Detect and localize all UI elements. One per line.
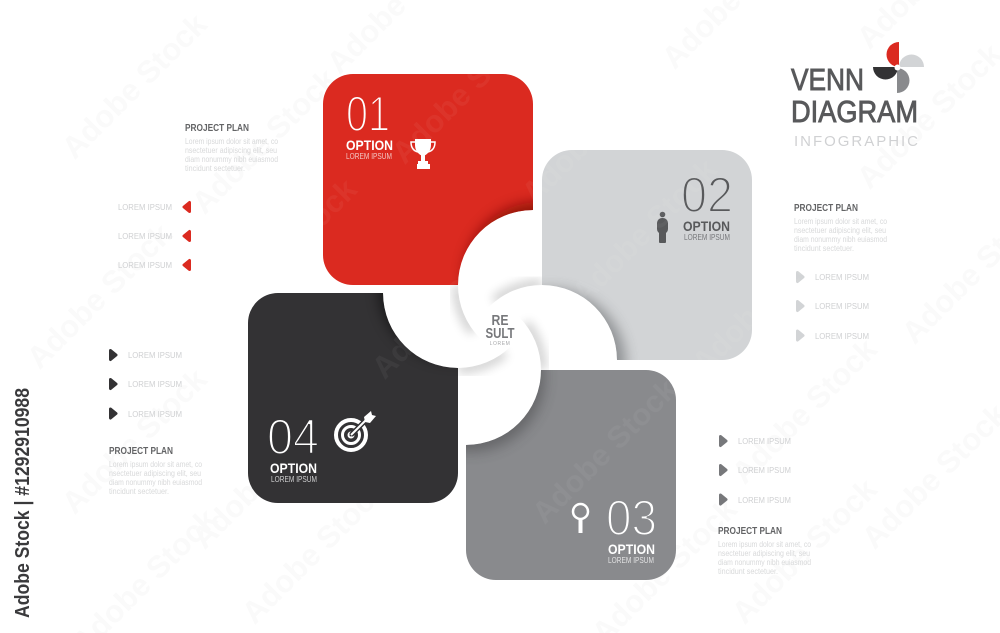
panel: 02 light grey [542,150,752,360]
number 03: 03 [606,490,657,546]
text block: bottom-left project plan: nsectetuer adipiscing elit, seu [109,469,201,478]
text block: bottom-left project plan: diam nonummy nibh euiasmod [109,478,202,487]
background watermark: Adobe Stock [185,396,344,555]
result label: SULT [486,326,515,342]
panel: 04 dark [248,293,458,503]
background watermark: Adobe Stock [185,61,344,220]
list: top-right light grey markers: LOREM IPSUM [815,302,869,311]
text block: top-right project plan: tincidunt sectetuer. [794,244,854,253]
title: INFOGRAPHIC [794,133,918,150]
option label 01: OPTION [346,137,393,153]
panel: 03 mid grey [466,370,676,580]
background watermark: Adobe Stock [55,361,214,520]
list: bottom-left dark markers: LOREM IPSUM [128,410,182,419]
sublabel 02: LOREM IPSUM [684,232,730,242]
text block: bottom-right project plan: PROJECT PLAN [718,526,782,537]
icon: pinwheel logo [873,42,924,93]
list: top-left red markers: LOREM IPSUM [118,232,172,241]
sublabel 04: LOREM IPSUM [271,474,317,484]
text block: bottom-right project plan: Lorem ipsum dolor sit amet, co [718,540,811,549]
title: DIAGRAM [791,94,918,129]
title: VENN [791,62,864,97]
text block: bottom-right project plan: tincidunt sectetuer. [718,567,778,576]
list: bottom-left dark markers: LOREM IPSUM [128,351,182,360]
result label: LOREM [490,341,510,347]
background watermark: Adobe Stock [725,471,884,630]
overlay watermark on panels: Adobe Stock [525,371,684,530]
panel: 01 red [323,74,533,285]
overlay watermark on panels: Adobe Stock [515,51,674,210]
text block: top-right project plan: Lorem ipsum dolor sit amet, co [794,217,887,226]
option label 04: OPTION [270,460,317,476]
sublabel 01: LOREM IPSUM [346,151,392,161]
icon: magnifier [573,504,588,533]
overlay watermark on panels: Adobe Stock [365,226,524,385]
overlay watermark on panels: Adobe Stock [385,11,544,170]
background watermark: Adobe Stock [55,6,214,165]
sublabel 03: LOREM IPSUM [608,555,654,565]
result label [486,313,515,347]
number 04: 04 [267,409,319,465]
text block: top-right project plan [794,203,887,253]
text block: top-right project plan: nsectetuer adipiscing elit, seu [794,226,886,235]
text block: bottom-right project plan: diam nonummy nibh euiasmod [718,558,811,567]
list: bottom-left dark markers: LOREM IPSUM [128,380,182,389]
option label 03: OPTION [608,541,655,557]
text block: top-left project plan: PROJECT PLAN [185,123,249,134]
background watermark: Adobe Stock [235,471,394,630]
text block: top-right project plan: PROJECT PLAN [794,203,858,214]
title [791,62,918,150]
list: top-left red markers: LOREM IPSUM [118,261,172,270]
list: top-left red markers: LOREM IPSUM [118,203,172,212]
text block: top-left project plan [185,123,278,173]
list: bottom-left dark markers [110,350,182,419]
side credit: Adobe Stock | #1292910988 [12,388,34,618]
list: bottom-right grey markers: LOREM IPSUM [738,466,791,475]
text block: bottom-left project plan: tincidunt sectetuer. [109,487,169,496]
number 01: 01 [346,86,390,142]
overlay watermark on panels: Adobe Stock [205,171,364,330]
list: top-left red markers [118,202,190,270]
text block: top-left project plan: nsectetuer adipiscing elit, seu [185,146,277,155]
icon: person [657,212,668,243]
centre swirl shadows [458,285,542,370]
text block: bottom-left project plan: Lorem ipsum dolor sit amet, co [109,460,202,469]
list: bottom-right grey markers: LOREM IPSUM [738,437,791,446]
list: bottom-right grey markers: LOREM IPSUM [738,496,791,505]
background watermark: Adobe Stock [20,216,179,375]
text block: bottom-left project plan [109,446,202,496]
list: bottom-right grey markers [720,436,791,505]
option label 02: OPTION [683,218,730,234]
text block: bottom-right project plan [718,526,811,576]
overlay watermark on panels [205,11,844,530]
list: top-right light grey markers: LOREM IPSUM [815,332,869,341]
text block: top-left project plan: Lorem ipsum dolor sit amet, co [185,137,278,146]
overlay watermark on panels: Adobe Stock [565,151,724,310]
text block: bottom-left project plan: PROJECT PLAN [109,446,173,457]
list: top-right light grey markers [798,272,869,341]
number 02: 02 [681,167,733,223]
text block: top-right project plan: diam nonummy nibh euiasmod [794,235,887,244]
text block: top-left project plan: diam nonummy nibh euiasmod [185,155,278,164]
list: top-right light grey markers: LOREM IPSUM [815,273,869,282]
icon: trophy [411,139,435,169]
overlay watermark on panels: Adobe Stock [685,221,844,380]
text block: bottom-right project plan: nsectetuer adipiscing elit, seu [718,549,810,558]
icon: target [336,411,376,450]
text block: top-left project plan: tincidunt sectetuer. [185,164,245,173]
background watermark: Adobe Stock [725,331,884,490]
result label: RE [492,313,509,329]
